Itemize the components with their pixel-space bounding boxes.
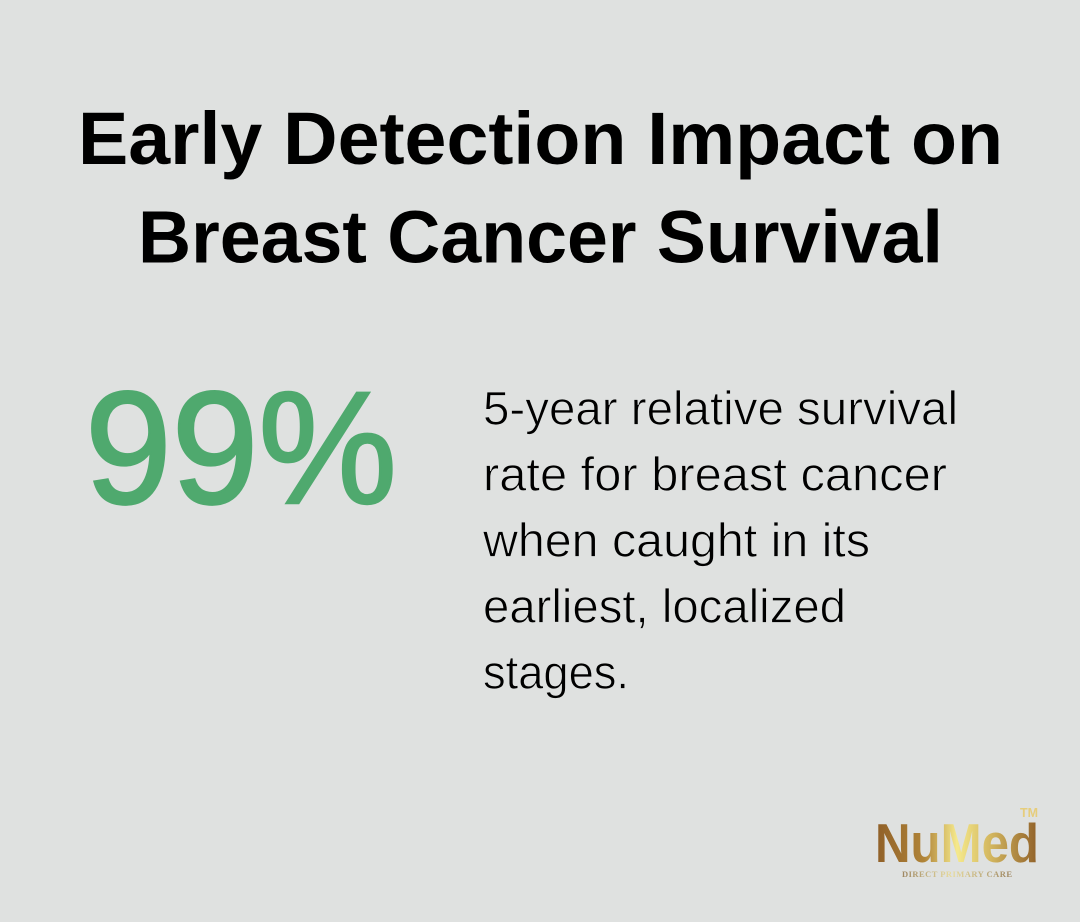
description text: rate for breast cancer — [483, 448, 947, 500]
big statistic: 99%: 99% — [85, 358, 397, 537]
title — [78, 97, 1003, 278]
description text: earliest, localized — [483, 580, 846, 632]
title: Breast Cancer Survival — [138, 196, 943, 278]
logo: NuMed: NuMed — [875, 812, 1039, 874]
description text — [482, 382, 958, 698]
description text: when caught in its — [482, 514, 870, 566]
title: Early Detection Impact on — [78, 97, 1003, 180]
logo: NuMed: TM — [1020, 805, 1038, 820]
description text: 5-year relative survival — [483, 382, 958, 434]
description text: stages. — [483, 646, 629, 698]
logo: NuMed: DIRECT PRIMARY CARE — [902, 869, 1012, 879]
